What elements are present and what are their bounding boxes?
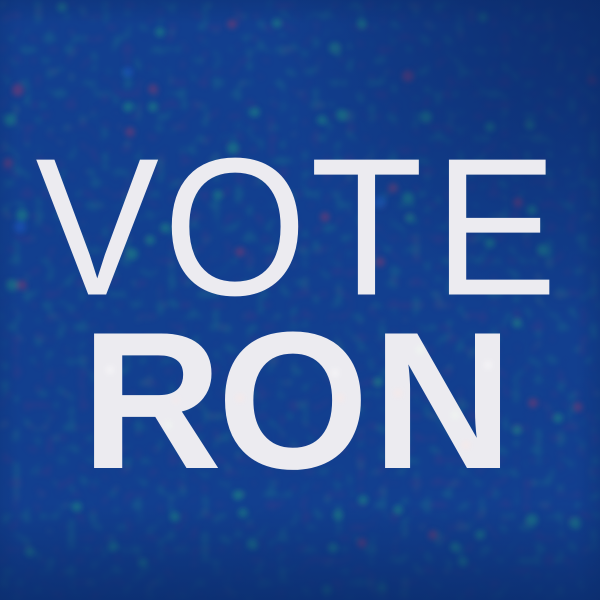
headline: VOTE: VOTE [35, 118, 557, 337]
headline: RON: RON [81, 292, 513, 510]
sparkle on letters [106, 346, 492, 449]
